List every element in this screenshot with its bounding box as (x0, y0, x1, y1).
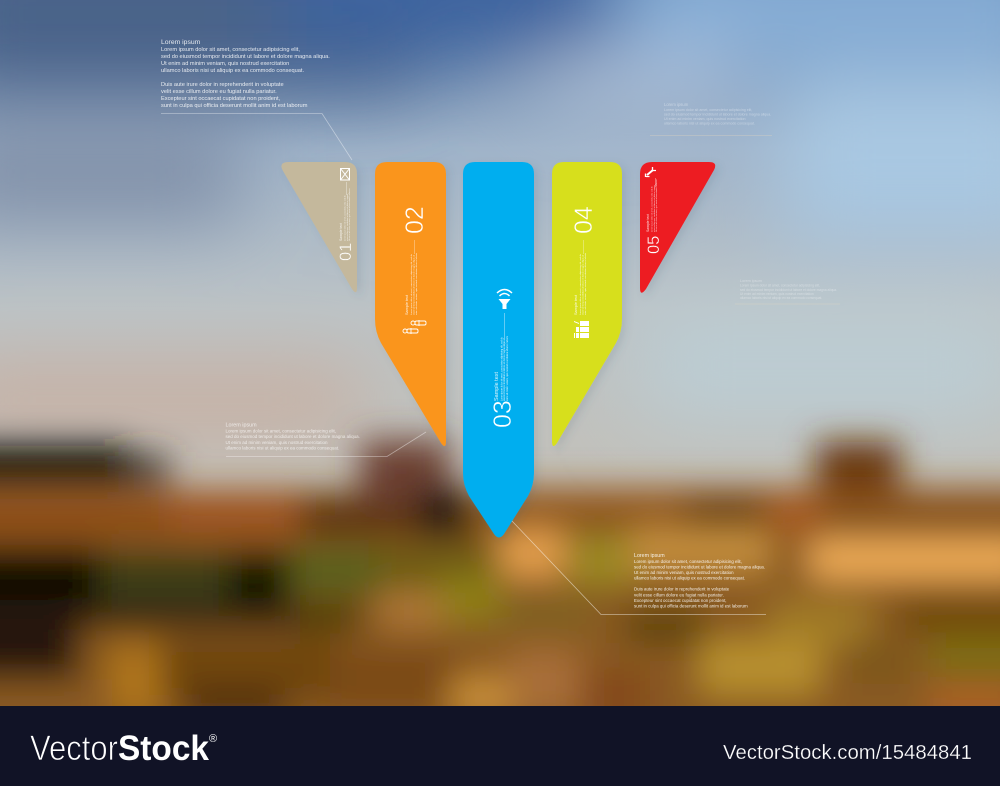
callout: left: ullamco laboris nisi ut aliquip ex ea commodo consequat. (226, 446, 339, 451)
text: sample text 02: Sample text (405, 294, 409, 315)
callout: left: Ut enim ad minim veniam, quis nostrud exercitation (226, 440, 328, 445)
text: sample text 02: eiusmod tempor incididunt ut labore et dolore magna aliqua ut (413, 255, 416, 315)
callout: top left: sunt in culpa qui officia deserunt mollit anim id est laborum (161, 103, 308, 109)
callout: bottom right: Excepteur sint occaecat cupidatat non proident, (634, 598, 727, 603)
callout: top right: Lorem ipsum dolor sit amet, consectetur adipisicing elit, (664, 108, 752, 112)
panel: segment 01 (281, 162, 357, 292)
callout: bottom right: Lorem ipsum dolor sit amet, consectetur adipisicing elit, (634, 559, 742, 564)
text: sample text 03: Lorem ipsum dolor sit amet, consectetur adipisicing elit, sed do (500, 336, 503, 401)
callout: left: sed do eiusmod tempor incididunt ut labore et dolore magna aliqua. (226, 434, 360, 439)
callout: bottom right: Ut enim ad minim veniam, quis nostrud exercitation (634, 570, 734, 575)
icon: wrench (646, 167, 656, 177)
icon: two people (403, 320, 426, 334)
callout: right: sed do eiusmod tempor incididunt ut labore et dolore magna aliqua. (740, 288, 837, 292)
callout: right: ullamco laboris nisi ut aliquip ex ea commodo consequat. (740, 296, 822, 300)
callout: left: Lorem ipsum dolor sit amet, consectetur adipisicing elit, (226, 428, 336, 434)
text: sample text 05 (646, 178, 658, 232)
callout: top left: Duis aute irure dolor in reprehenderit in voluptate (161, 82, 284, 88)
text: sample text 03: enim ad minim veniam, quis nostrud exercitation ullamco laboris (506, 335, 509, 401)
text: sample text 04: eiusmod tempor incididunt ut labore et dolore magna aliqua ut (582, 255, 585, 315)
panel: segment 03 (463, 162, 534, 538)
callout: bottom right: Duis aute irure dolor in reprehenderit in voluptate (634, 587, 730, 592)
callout: top right: Ut enim ad minim veniam, quis nostrud exercitation (664, 117, 746, 121)
shape 04 (552, 162, 622, 446)
callout: top left: Ut enim ad minim veniam, quis nostrud exercitation (161, 61, 289, 67)
callout: top right (650, 102, 772, 136)
callout: bottom right: ullamco laboris nisi ut aliquip ex ea commodo consequat. (634, 576, 745, 581)
panel: segment 05 (640, 162, 715, 293)
text: sample text 02: Lorem ipsum dolor sit amet, consectetur adipisicing elit, sed do (410, 253, 413, 315)
callout: right (735, 279, 840, 304)
shape 03 (463, 162, 534, 538)
url text: VectorStock.com/15484841 (723, 742, 972, 764)
callout: top left: ullamco laboris nisi ut aliquip ex ea commodo consequat. (161, 68, 304, 74)
number 02: 02 (401, 206, 429, 234)
text: sample text 04: enim ad minim veniam, quis nostrud exercitation ullamco laboris (584, 252, 587, 315)
callout: bottom right: velit esse cillum dolore eu fugiat nulla pariatur. (634, 592, 724, 597)
callout: top right: ullamco laboris nisi ut aliquip ex ea commodo consequat. (664, 122, 755, 126)
shape 05 (640, 162, 715, 293)
callout: top left: sed do eiusmod tempor incididunt ut labore et dolore magna aliqua. (161, 54, 330, 60)
text: sample text 01: Ut enim ad minim veniam, quis nostrud exercitation ullamco (348, 187, 351, 241)
callout: top right: Lorem ipsum (664, 102, 689, 107)
text: sample text 05: Ut enim ad minim veniam, quis nostrud exercitation ullamco (655, 178, 658, 232)
callout: right: Lorem ipsum dolor sit amet, consectetur adipisicing elit, (740, 284, 820, 288)
shape 02 (375, 162, 446, 446)
text: sample text 03 (494, 335, 509, 401)
callout: top right: sed do eiusmod tempor incididunt ut labore et dolore magna aliqua. (664, 112, 771, 116)
logo: VectorStock: ® (209, 733, 217, 745)
callout: bottom right: Lorem ipsum (634, 553, 665, 559)
icon: envelope (340, 168, 350, 180)
callout: top left (161, 39, 352, 160)
right half (816, 442, 900, 508)
number 01: 01 (337, 243, 355, 261)
shape 01 (281, 162, 357, 292)
number 03: 03 (489, 400, 517, 428)
text: sample text 04 (574, 252, 587, 315)
callout: bottom right (512, 521, 766, 614)
text: sample text 02: enim ad minim veniam, quis nostrud exercitation ullamco laboris (415, 252, 418, 315)
callout: left (226, 422, 426, 456)
text: sample text 02 (405, 252, 418, 315)
text: sample text 01: Lorem ipsum dolor sit amet, consectetur elit, sed do (343, 194, 346, 241)
callout: top left: Lorem ipsum dolor sit amet, consectetur adipisicing elit, (161, 47, 300, 53)
text: sample text 05: Lorem ipsum dolor sit amet, consectetur elit, sed do (650, 185, 653, 232)
callout: right: Lorem ipsum (740, 279, 762, 283)
icon: signal speaker (497, 290, 512, 309)
text: sample text 01: eiusmod tempor incididunt ut labore et dolore magna (346, 193, 349, 241)
text: sample text 03: Sample text (494, 371, 500, 401)
callout: bottom right: sunt in culpa qui officia deserunt mollit anim id est laborum (634, 604, 748, 608)
text: sample text 05: Sample text (646, 214, 650, 232)
text: sample text 04: Sample text (574, 294, 578, 315)
callout: top left: Excepteur sint occaecat cupidatat non proident, (161, 96, 281, 102)
panel: segment 04 (552, 162, 622, 446)
callout: top left: Lorem ipsum (161, 39, 201, 46)
text: sample text 05: eiusmod tempor incididunt ut labore et dolore magna (653, 184, 656, 232)
text: sample text 01: Sample text (339, 223, 343, 241)
callout: right: Ut enim ad minim veniam, quis nostrud exercitation (740, 292, 814, 296)
number 05: 05 (645, 236, 663, 254)
footer band (0, 706, 1000, 786)
logo: VectorStock (30, 729, 217, 768)
text: sample text 03: eiusmod tempor incididunt ut labore et dolore magna aliqua ut (503, 338, 506, 401)
panel: segment 02 (375, 162, 446, 446)
text: sample text 04: Lorem ipsum dolor sit amet, consectetur adipisicing elit, sed do (579, 253, 582, 315)
logo: VectorStock: Stock (118, 729, 210, 768)
callout: left: Lorem ipsum (226, 422, 257, 428)
icon: bars (574, 321, 589, 338)
callout: top left: velit esse cillum dolore eu fugiat nulla pariatur. (161, 89, 277, 95)
text: sample text 01 (339, 187, 351, 241)
callout: bottom right: sed do eiusmod tempor incididunt ut labore et dolore magna aliqua. (634, 564, 765, 570)
logo: VectorStock: Vector (30, 729, 118, 768)
number 04: 04 (570, 206, 598, 234)
